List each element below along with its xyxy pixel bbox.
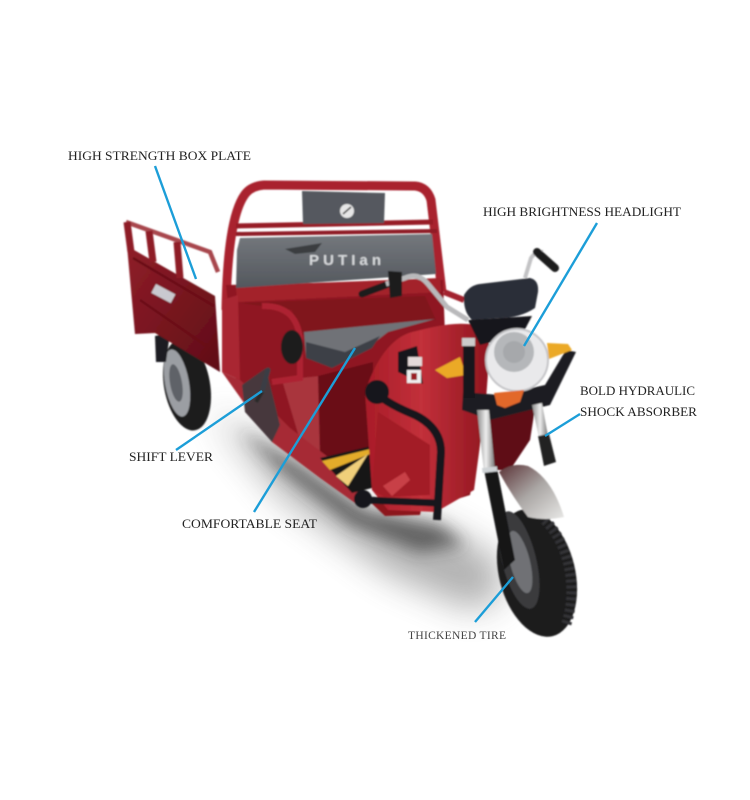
callout: thickened tire	[408, 577, 513, 642]
side body post and step	[222, 295, 365, 503]
handlebars	[362, 252, 555, 320]
callout: high strength box plate: HIGH STRENGTH BOX PLATE	[68, 149, 251, 163]
callout: high brightness headlight	[483, 205, 681, 346]
turn signals and logo plate	[435, 338, 572, 408]
callout: bold hydraulic shock absorber: SHOCK ABSORBER	[580, 405, 698, 419]
ground shadow	[210, 410, 500, 610]
rear wheel	[155, 333, 218, 434]
callout: bold hydraulic shock absorber: BOLD HYDRAULIC	[580, 384, 695, 398]
fork and lower body	[462, 350, 576, 470]
callout: shift lever: SHIFT LEVER	[129, 450, 214, 464]
tricycle illustration	[126, 185, 590, 645]
seat rail	[262, 306, 300, 382]
instrument cluster	[464, 278, 538, 345]
headlight	[486, 329, 548, 391]
front tire	[484, 501, 590, 645]
front fender	[499, 465, 564, 519]
lower grey banner with brand	[236, 234, 436, 288]
cargo box side panel	[126, 222, 220, 372]
front forks	[477, 403, 556, 570]
crash bar	[354, 380, 441, 520]
callout: bold hydraulic shock absorber	[545, 384, 698, 436]
cargo box rear frame	[226, 185, 442, 310]
lower fairing belly	[368, 420, 484, 516]
callout: comfortable seat	[182, 348, 355, 531]
shift lever	[256, 370, 268, 402]
seat cushion	[281, 319, 435, 368]
callout: high brightness headlight: HIGH BRIGHTNESS HEADLIGHT	[483, 205, 681, 219]
callout: comfortable seat: COMFORTABLE SEAT	[182, 517, 317, 531]
floor stripes	[320, 446, 372, 493]
upper grey pad	[302, 191, 385, 224]
front fairing	[365, 324, 490, 512]
callout: shift lever	[129, 391, 262, 464]
callout: high strength box plate	[68, 149, 251, 279]
callout: thickened tire: THICKENED TIRE	[408, 630, 506, 642]
cargo box back wall	[226, 278, 445, 465]
lower grey banner with brand: PUTIan	[309, 252, 381, 269]
